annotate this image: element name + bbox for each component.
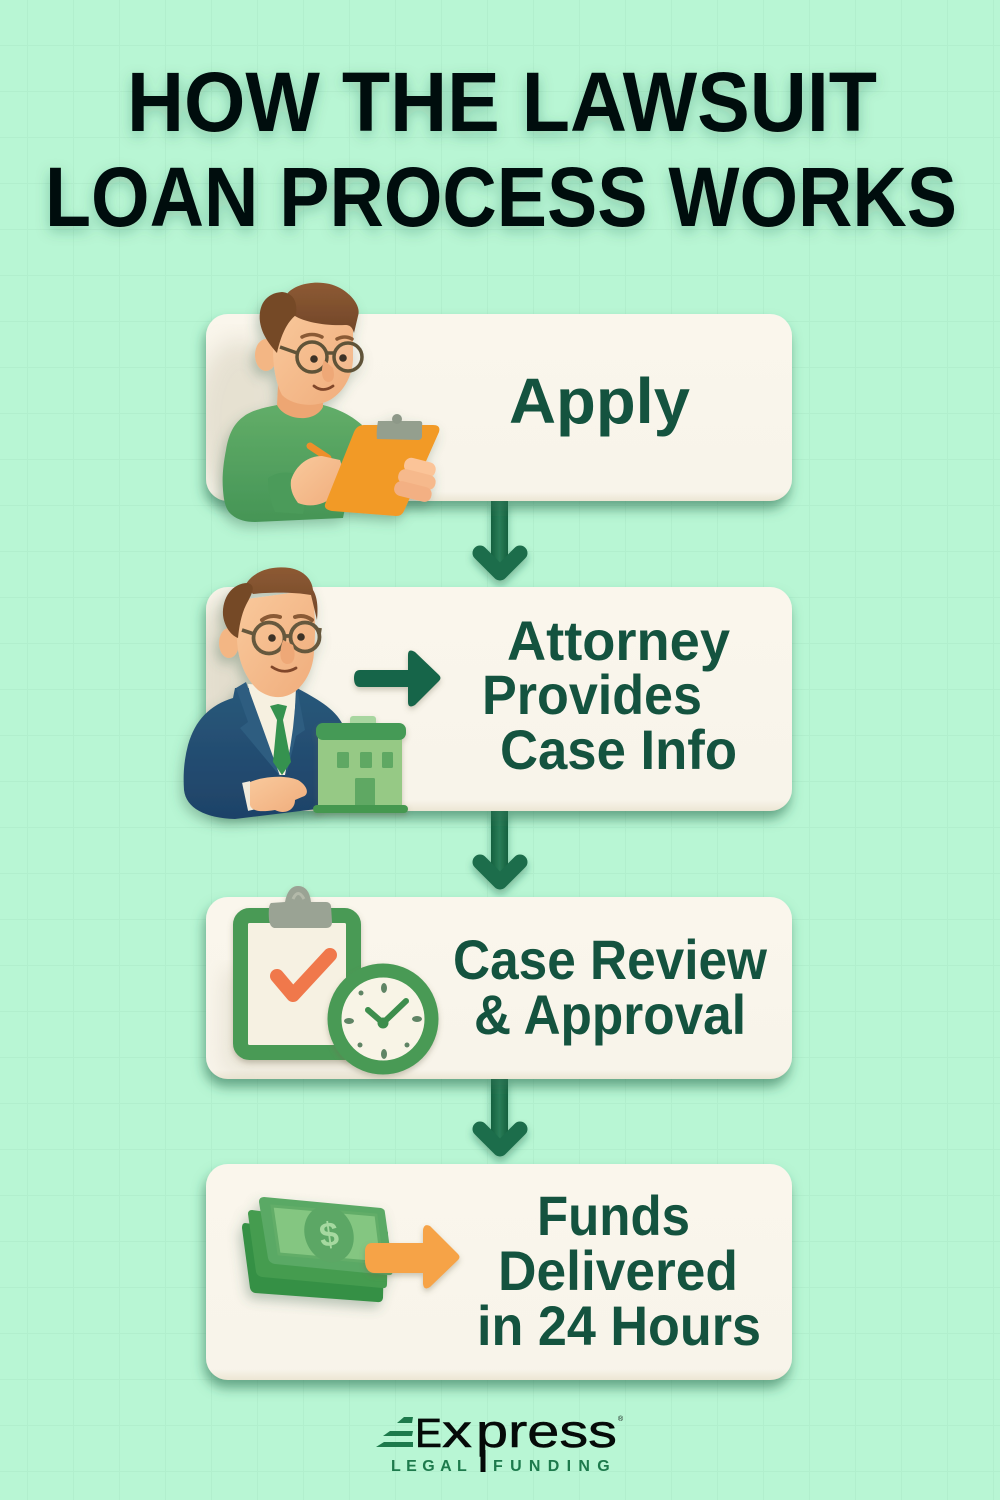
heading: case review and approval: Case Review — [453, 928, 767, 991]
panel: apply — [195, 283, 792, 522]
heading: funds delivered in 24 hours: Delivered — [498, 1239, 738, 1302]
logo: LEGAL — [391, 1458, 472, 1475]
logo: press — [476, 1405, 617, 1457]
icon: stack of cash: $ — [317, 1215, 341, 1255]
heading: case review and approval: & Approval — [474, 983, 746, 1046]
heading: case review and approval — [453, 928, 767, 1046]
logo: E — [415, 1410, 442, 1456]
icon: logo stripes — [376, 1417, 413, 1447]
icon: office building — [313, 716, 408, 813]
heading: funds delivered in 24 hours: Funds — [537, 1184, 690, 1247]
arrow: review to funds — [480, 1077, 520, 1149]
heading: funds delivered in 24 hours — [477, 1184, 761, 1357]
icon: clock — [334, 970, 432, 1068]
heading: attorney provides case info — [482, 609, 737, 781]
icon: check mark — [277, 955, 330, 995]
icon: man with clipboard — [223, 283, 439, 522]
icon: stack of cash — [242, 1197, 393, 1302]
logo: x — [442, 1405, 472, 1457]
icon: orange arrow — [365, 1225, 460, 1288]
panel: attorney — [184, 567, 792, 819]
heading: attorney provides case info: Provides — [482, 663, 702, 726]
title: HOW THE LAWSUIT — [127, 55, 877, 149]
icon: attorney in suit — [184, 567, 343, 819]
arrow: apply to attorney — [480, 500, 520, 573]
heading: funds delivered in 24 hours: in 24 Hours — [477, 1294, 761, 1357]
heading: attorney provides case info: Case Info — [500, 718, 737, 781]
title — [45, 55, 957, 244]
icon: right arrow — [354, 651, 440, 706]
logo: FUNDING — [493, 1458, 617, 1475]
panel: review — [206, 886, 792, 1079]
heading: attorney provides case info: Attorney — [507, 609, 730, 672]
panel: funds — [206, 1164, 792, 1380]
logo — [376, 1405, 624, 1475]
arrow: attorney to review — [480, 809, 520, 882]
heading: apply: Apply — [509, 365, 690, 437]
icon: clipboard with checkmark — [240, 886, 354, 1052]
logo: ® — [618, 1415, 624, 1423]
